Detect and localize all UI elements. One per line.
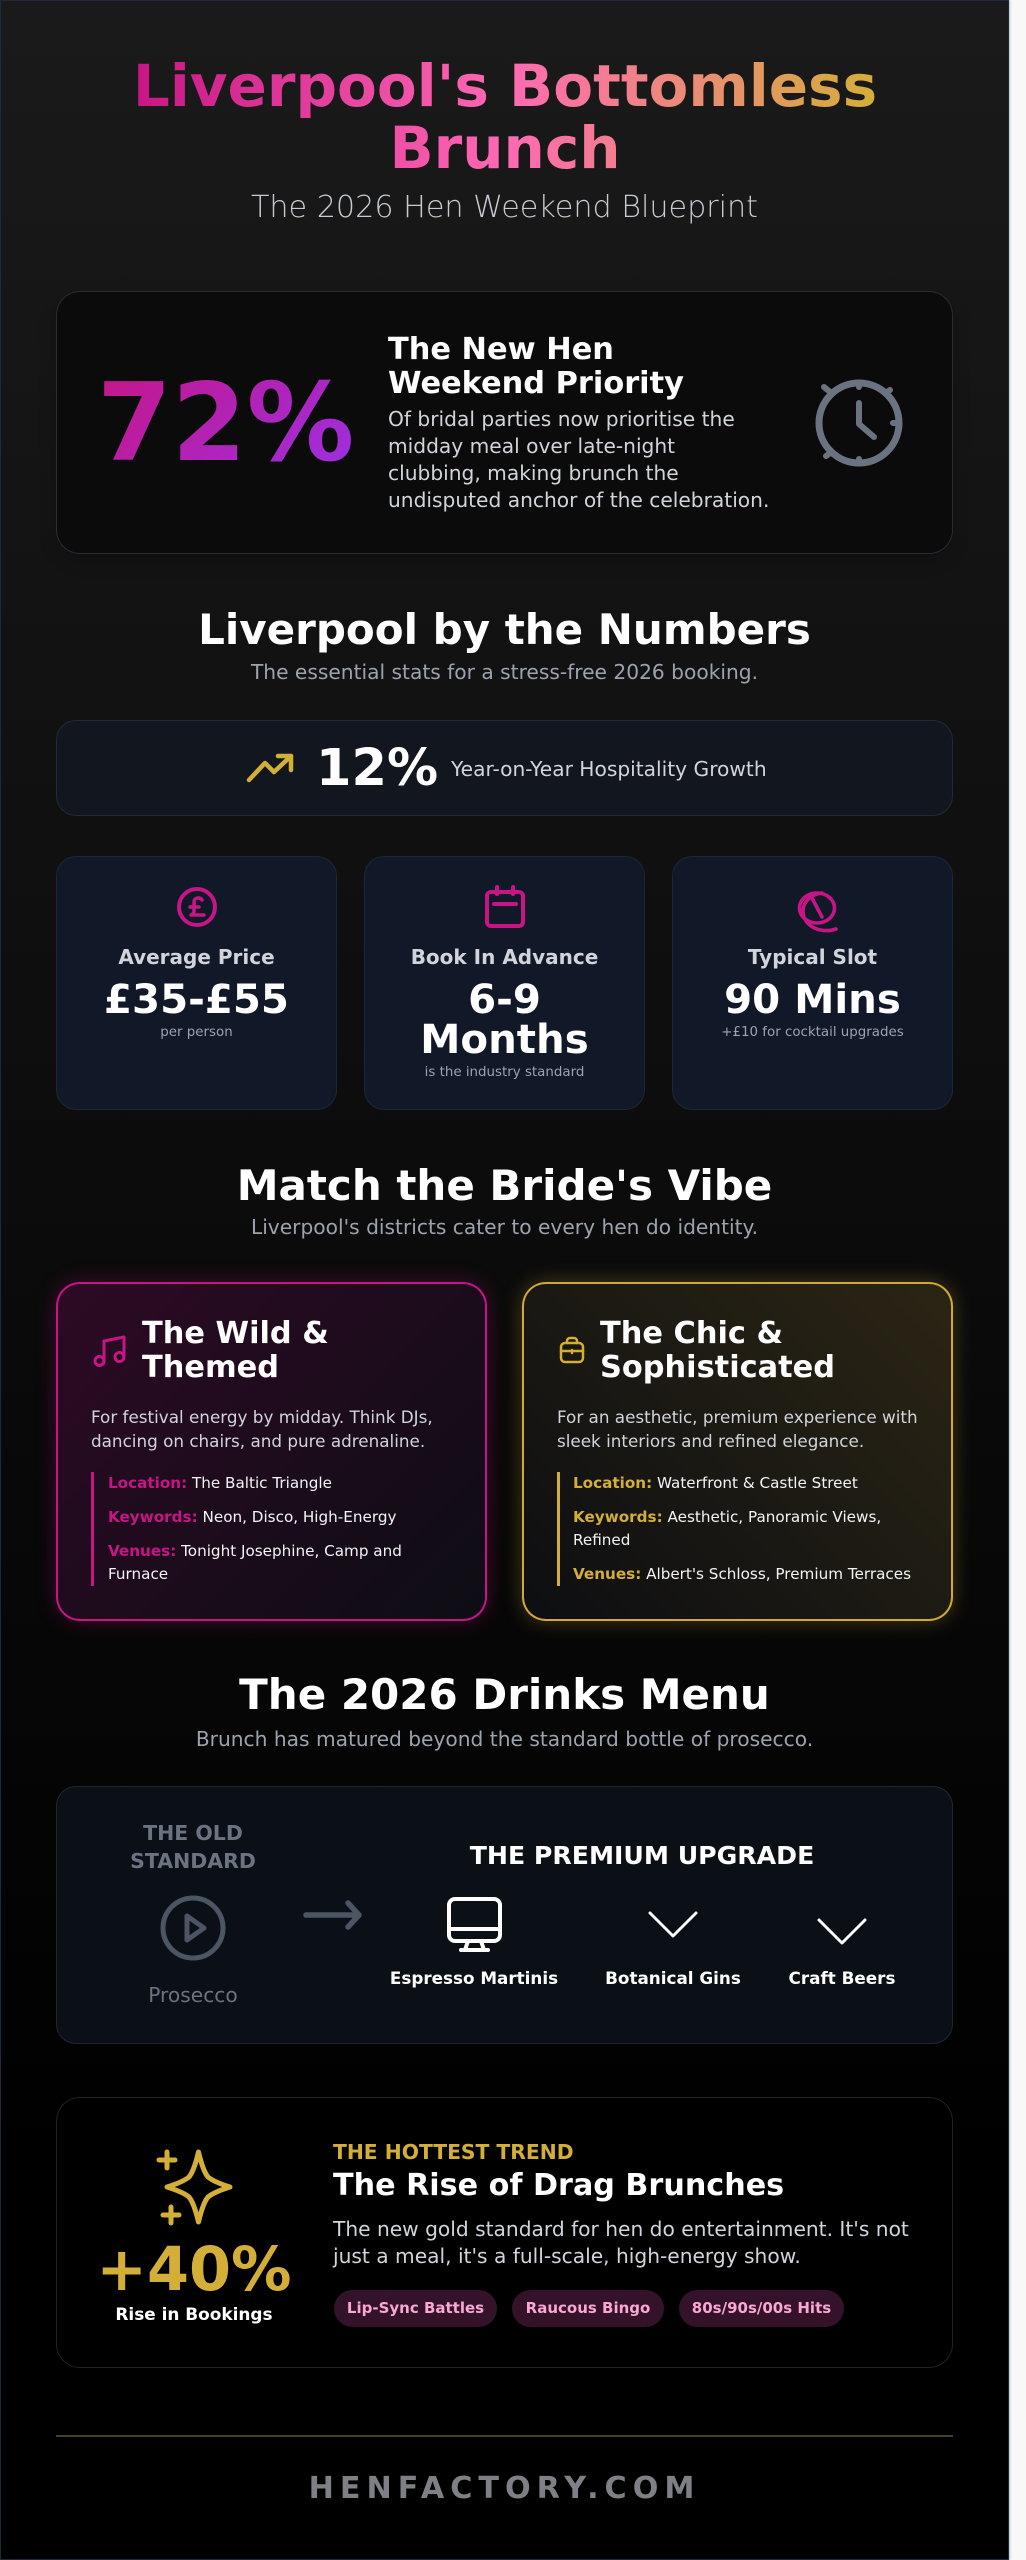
old standard label xyxy=(130,1821,256,1873)
old standard label: STANDARD xyxy=(130,1849,256,1873)
value: 6-9 xyxy=(468,976,541,1023)
growth value: 12% xyxy=(316,739,438,798)
venues xyxy=(108,1542,402,1583)
card title: The Chic & xyxy=(600,1316,783,1351)
card title: Themed xyxy=(142,1350,279,1385)
hero body text: Of bridal parties now prioritise the xyxy=(388,407,735,431)
footer xyxy=(56,2435,953,2527)
icon: sparkles xyxy=(156,2150,232,2226)
header: title and subtitle xyxy=(133,52,877,225)
pill: lip-sync: Lip-Sync Battles xyxy=(347,2299,484,2317)
title: Brunch xyxy=(389,114,621,182)
trend stat: +40% xyxy=(96,2235,292,2305)
icon: overlapping rings xyxy=(798,891,838,932)
card description: For festival energy by midday. Think DJs, xyxy=(91,1407,433,1427)
note: per person xyxy=(160,1025,233,1040)
trend stat label: Rise in Bookings xyxy=(115,2304,273,2324)
growth label: Year-on-Year Hospitality Growth xyxy=(451,757,767,781)
card title xyxy=(600,1316,835,1385)
hero body text xyxy=(388,407,769,512)
stat card: typical slot xyxy=(672,856,953,1110)
icon: clock xyxy=(816,380,902,466)
panel: growth strip xyxy=(56,720,953,816)
card title xyxy=(142,1316,329,1385)
pill: bingo: Raucous Bingo xyxy=(526,2299,650,2317)
espresso martinis label: Espresso Martinis xyxy=(390,1968,558,1988)
hero body text: undisputed anchor of the celebration. xyxy=(388,488,769,512)
heading: The 2026 Drinks Menu xyxy=(239,1670,770,1719)
trend body xyxy=(332,2217,909,2268)
botanical gins label: Botanical Gins xyxy=(605,1968,741,1988)
subheading: The essential stats for a stress-free 2026 booking. xyxy=(251,660,758,684)
card title: Sophisticated xyxy=(600,1350,835,1385)
stat card: average price xyxy=(56,856,337,1110)
icon: monitor xyxy=(447,1897,502,1952)
pill: lip-sync xyxy=(334,2290,497,2327)
icon: trending up xyxy=(246,754,294,782)
keywords: Keywords: Aesthetic, Panoramic Views, xyxy=(573,1508,881,1526)
craft beers label: Craft Beers xyxy=(789,1968,895,1988)
icon: calendar xyxy=(485,885,525,928)
value: £35-£55 xyxy=(104,976,289,1023)
hero heading: The New Hen xyxy=(388,332,614,367)
section heading: drinks xyxy=(196,1670,813,1751)
arrow: old to premium xyxy=(303,1900,362,1930)
icon: bag xyxy=(560,1336,584,1364)
pill: bingo xyxy=(512,2290,664,2327)
icon: glass xyxy=(648,1911,698,1938)
note: +£10 for cocktail upgrades xyxy=(721,1025,904,1040)
section heading: numbers xyxy=(198,605,811,684)
subheading: Liverpool's districts cater to every hen do identity. xyxy=(251,1215,758,1239)
trend body: just a meal, it's a full-scale, high-energy show. xyxy=(333,2244,801,2268)
subheading: Brunch has matured beyond the standard bottle of prosecco. xyxy=(196,1727,813,1751)
icon: music notes xyxy=(94,1336,126,1367)
hero heading: Weekend Priority xyxy=(388,366,684,401)
panel: wild and themed xyxy=(56,1282,487,1621)
stat card: book in advance xyxy=(364,856,645,1110)
location: Location: The Baltic Triangle xyxy=(108,1474,332,1492)
trend heading: The Rise of Drag Brunches xyxy=(333,2168,784,2203)
icon: glass xyxy=(817,1918,867,1945)
card title: The Wild & xyxy=(142,1316,329,1351)
card description: dancing on chairs, and pure adrenaline. xyxy=(91,1431,425,1451)
big stat 72%: 72% xyxy=(97,361,354,486)
card description: For an aesthetic, premium experience with xyxy=(557,1407,918,1427)
venues: Furnace xyxy=(108,1565,168,1583)
value: 90 Mins xyxy=(724,976,901,1023)
hero heading xyxy=(388,332,684,401)
keywords: Refined xyxy=(573,1531,630,1549)
details list xyxy=(91,1472,454,1586)
note: is the industry standard xyxy=(425,1065,584,1080)
label: Book In Advance xyxy=(411,945,598,969)
value: Months xyxy=(420,1016,589,1063)
label: Average Price xyxy=(118,945,275,969)
panel: drinks menu xyxy=(56,1786,953,2044)
card description xyxy=(557,1407,918,1451)
panel: chic and sophisticated xyxy=(522,1282,953,1621)
panel: 72% hero stat xyxy=(56,291,953,554)
pill: hits xyxy=(679,2290,844,2327)
heading: Match the Bride's Vibe xyxy=(237,1161,772,1210)
trend body: The new gold standard for hen do entertainment. It's not xyxy=(333,2217,909,2241)
icon: play circle xyxy=(160,1896,226,1960)
keywords xyxy=(573,1508,881,1549)
title: Liverpool's Bottomless xyxy=(133,52,877,120)
keywords: Keywords: Neon, Disco, High-Energy xyxy=(108,1508,396,1526)
footer brand: HENFACTORY.COM xyxy=(309,2471,700,2506)
location: Location: Waterfront & Castle Street xyxy=(573,1474,858,1492)
card description xyxy=(91,1407,433,1451)
premium upgrade heading: THE PREMIUM UPGRADE xyxy=(470,1841,814,1870)
heading: Liverpool by the Numbers xyxy=(198,605,811,654)
card description: sleek interiors and refined elegance. xyxy=(557,1431,864,1451)
section heading: vibe xyxy=(237,1161,772,1239)
old standard label: THE OLD xyxy=(143,1821,243,1845)
value xyxy=(420,976,589,1063)
subtitle: The 2026 Hen Weekend Blueprint xyxy=(251,190,758,225)
panel: drag brunch trend xyxy=(56,2097,953,2368)
hero body text: clubbing, making brunch the xyxy=(388,461,679,485)
details list xyxy=(557,1472,920,1586)
icon: pound coin xyxy=(177,887,217,927)
label: Typical Slot xyxy=(748,945,877,969)
eyebrow: THE HOTTEST TREND xyxy=(333,2140,574,2164)
prosecco label: Prosecco xyxy=(148,1983,238,2007)
pill: hits: 80s/90s/00s Hits xyxy=(692,2299,831,2317)
venues: Venues: Tonight Josephine, Camp and xyxy=(108,1542,402,1560)
title xyxy=(130,56,880,179)
hero body text: midday meal over late-night xyxy=(388,434,675,458)
venues: Venues: Albert's Schloss, Premium Terraces xyxy=(573,1565,911,1583)
